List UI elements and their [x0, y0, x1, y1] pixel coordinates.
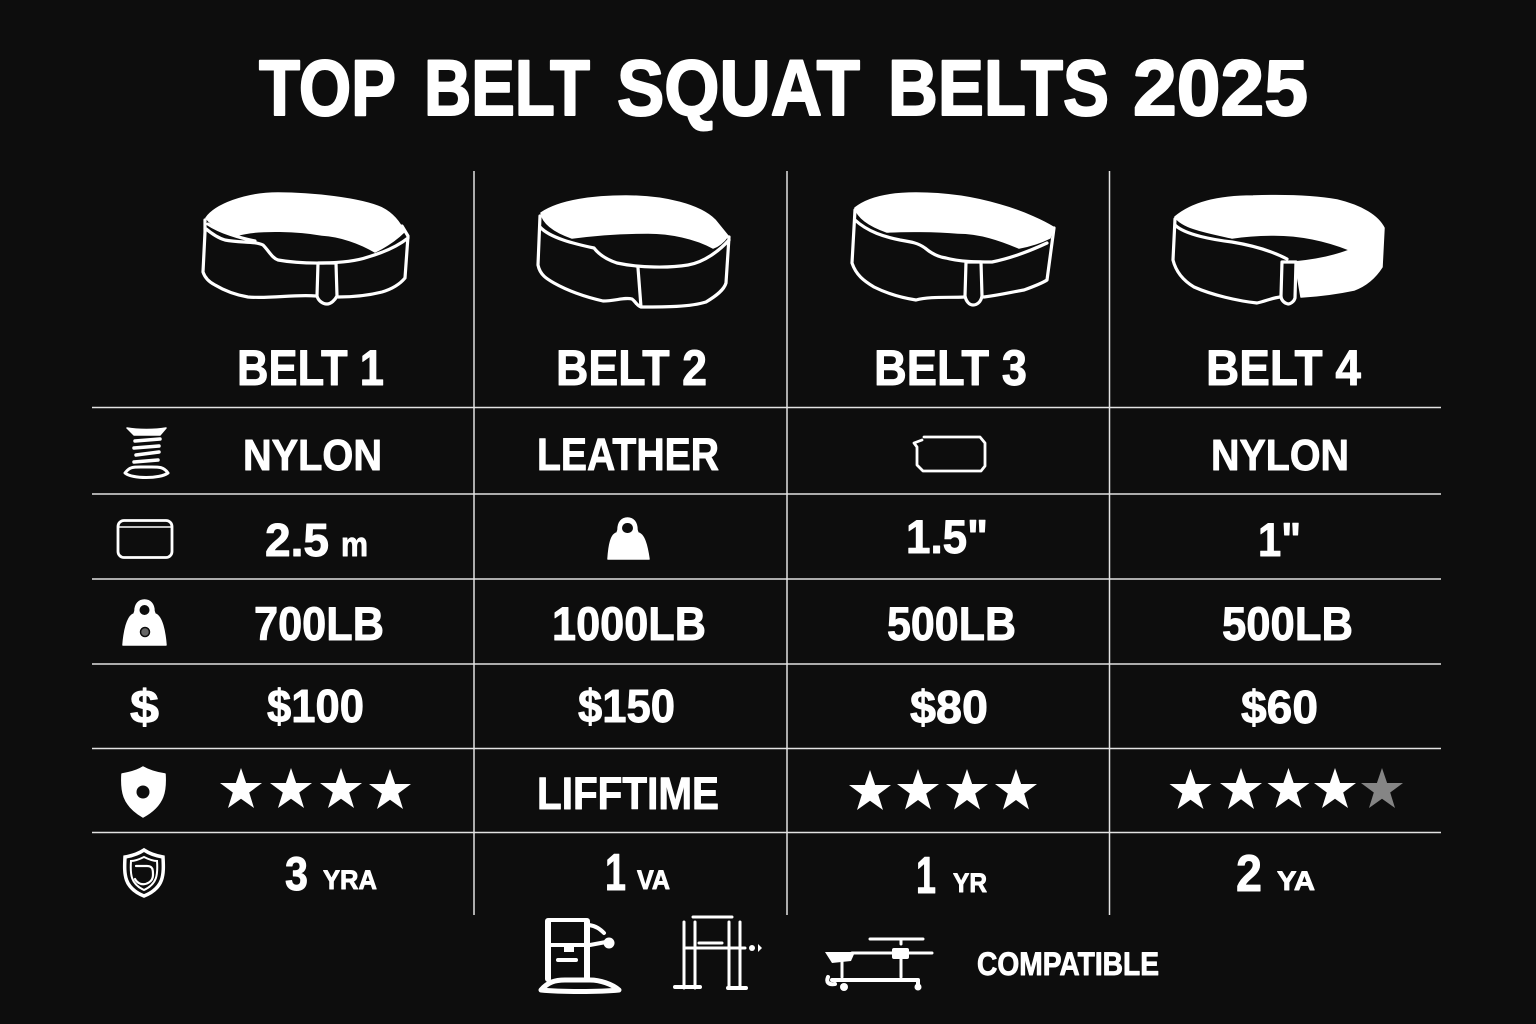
icon: dollar: $	[130, 680, 159, 733]
value: belt 4 warranty: 2	[1236, 845, 1262, 903]
value: belt 2 warranty: VA	[637, 865, 670, 895]
title: BELT	[424, 43, 590, 132]
row: price	[130, 680, 1318, 733]
icon: width card	[118, 520, 172, 558]
column headers: belts	[203, 193, 1384, 396]
icon: warranty shield	[125, 850, 163, 896]
row: capacity	[123, 597, 1353, 650]
icon: belt squat machine	[541, 920, 619, 992]
value: belt 1 width	[265, 514, 368, 566]
stars: belt 1	[220, 768, 411, 809]
value: belt 3 capacity: 500LB	[887, 597, 1016, 650]
value: belt 1 material: NYLON	[243, 431, 382, 480]
value: belt 4 warranty	[1236, 845, 1315, 903]
value: belt 4 capacity: 500LB	[1222, 597, 1353, 650]
row: material	[125, 428, 1349, 480]
value: belt 2 price: $150	[578, 680, 675, 732]
value: belt 2 material: LEATHER	[537, 429, 719, 480]
icon: belt 4	[1173, 196, 1384, 304]
value: belt 1 capacity: 700LB	[254, 597, 384, 650]
value: belt 1 warranty	[285, 847, 377, 900]
value: belt 4 width: 1"	[1258, 513, 1301, 566]
value: belt 1 width: 2.5	[265, 514, 329, 566]
value: belt 4 warranty: YA	[1277, 866, 1315, 896]
icon: spool	[125, 428, 168, 478]
value: belt 2 warranty: 1	[605, 844, 626, 902]
title: SQUAT	[617, 43, 860, 132]
icon: belt 1	[203, 193, 408, 304]
value: belt 2 capacity: 1000LB	[552, 597, 706, 650]
label: belt 2: BELT 2	[556, 340, 707, 396]
icon: shield	[122, 767, 165, 817]
value: belt 3 width: 1.5"	[906, 510, 988, 563]
compatible equipment	[541, 917, 1159, 992]
icon: lever machine	[825, 939, 932, 991]
value: belt 4 material: NYLON	[1211, 431, 1349, 480]
value: belt 1 warranty: YRA	[323, 865, 377, 895]
row: warranty	[125, 844, 1315, 905]
icon: belt 2	[538, 196, 729, 307]
label: belt 1: BELT 1	[237, 340, 384, 396]
value: belt 3 price: $80	[910, 681, 988, 733]
title	[259, 43, 1308, 132]
icon: belt 3	[852, 193, 1054, 305]
title: BELTS	[888, 43, 1109, 132]
row: width	[118, 510, 1301, 566]
title: TOP	[259, 43, 396, 132]
value: belt 3 warranty: 1	[916, 847, 936, 905]
label: belt 4: BELT 4	[1206, 340, 1361, 396]
label: belt 3: BELT 3	[874, 340, 1027, 396]
value: belt 1 width: m	[341, 526, 368, 564]
title: 2025	[1133, 43, 1308, 132]
label: compatible: COMPATIBLE	[977, 946, 1159, 982]
value: belt 3 warranty: YR	[953, 868, 987, 898]
icon: weight	[123, 600, 166, 645]
stars: belt 3	[849, 769, 1037, 810]
value: belt 1 price: $100	[267, 680, 364, 732]
icon: power rack	[675, 917, 762, 988]
icon: belt 3 material strap	[914, 437, 985, 471]
value: belt 4 price: $60	[1241, 681, 1318, 733]
value: belt 1 warranty: 3	[285, 847, 308, 900]
value: belt 3 warranty	[916, 847, 987, 905]
value: belt 2 warranty	[605, 844, 670, 902]
value: belt 2 warranty text: LIFFTIME	[537, 768, 719, 819]
stars: belt 4	[1170, 768, 1403, 809]
row: rating	[122, 767, 1403, 819]
icon: belt 2 weight	[608, 518, 649, 559]
